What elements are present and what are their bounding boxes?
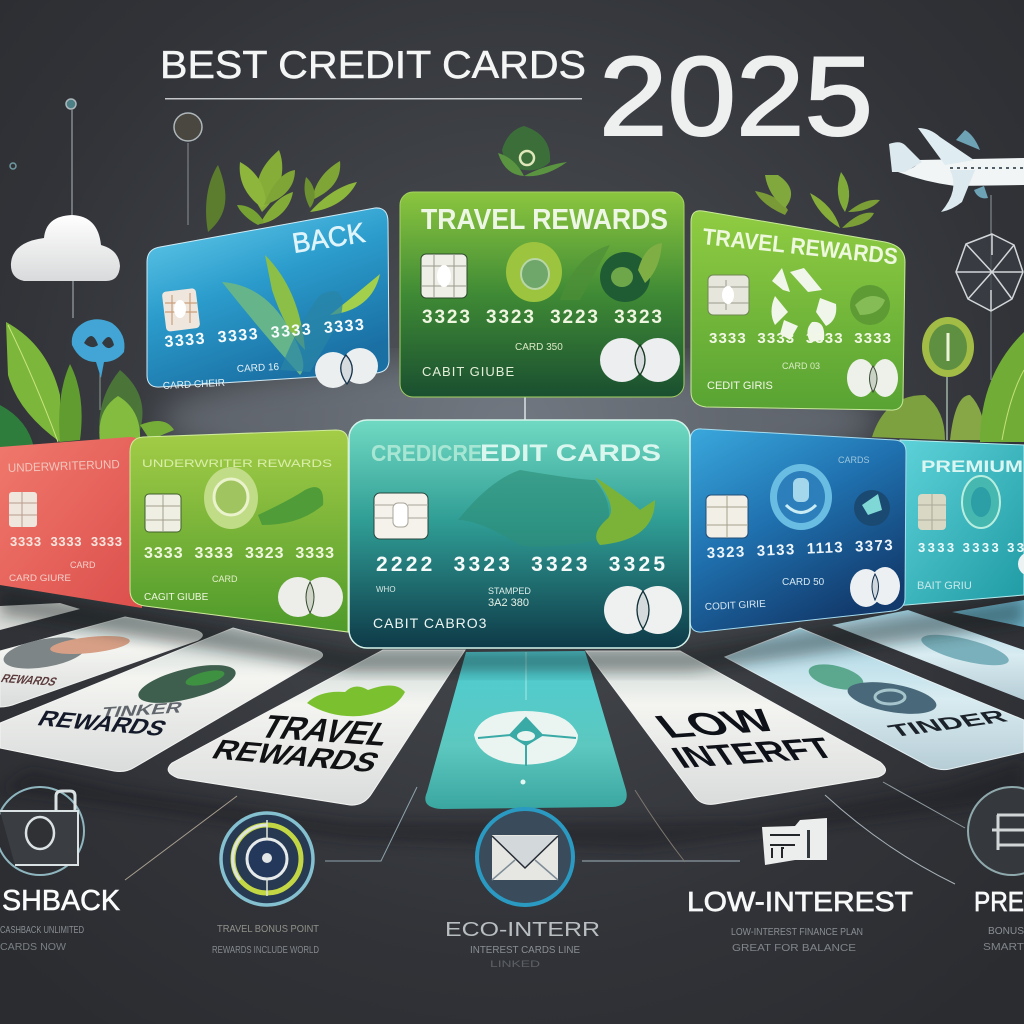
card: teal premium: BAIT GRIU [917,580,972,592]
icon: airplane [889,128,1024,212]
strip: left travel: REWARDS [33,706,172,740]
card: blue mid: 3323 3133 1113 3373 [706,537,893,562]
chip [162,288,200,332]
column: premium [968,787,1024,953]
icon: wire hexagon [956,195,1023,380]
column: premium: BONUS [988,926,1024,937]
card: centre teal credit cards [349,420,690,648]
column: low-interest [687,818,913,954]
card: green mid: CARD [212,574,238,584]
title: best credit cards: BEST CREDIT CARDS [160,44,586,87]
chip [421,254,467,298]
card: blue mid: CARDS [838,455,870,465]
chip [374,493,428,539]
column: cash back: SHBACK [2,885,121,917]
card: teal premium [895,440,1024,606]
card: green travel rewards: CARD 350 [515,342,563,353]
card: red: CARD [70,560,96,570]
icon: blue knot [72,319,124,410]
column: low-interest: GREAT FOR BALANCE [732,943,856,954]
card: centre teal credit cards: CREDICRE [371,440,482,466]
recycle symbol [772,268,836,342]
card: green travel rewards [400,192,684,397]
card: blue cash back: CARD CHEIR [163,378,225,392]
card: centre teal credit cards: STAMPED [488,586,531,596]
card: lime travel rewards: 3333 3333 3333 3333 [709,330,891,347]
card: red: CARD GIURE [9,573,71,583]
strip: travel rewards: TRAVEL [254,710,398,753]
card: green mid [130,430,348,632]
column: eco-interest [445,809,600,969]
icon: document [762,818,827,865]
column: cash back [0,787,121,953]
card: centre teal credit cards: 2222 3323 3323 3325 [376,553,665,576]
column: low-interest: LOW-INTEREST FINANCE PLAN [731,927,863,938]
strip: travel rewards: REWARDS [206,734,385,778]
chip [708,275,749,315]
strip: far right [832,600,1024,700]
column: eco-interest: INTEREST CARDS LINE [470,945,580,956]
card: blue cash back: BACK [290,217,367,259]
column: eco-interest: LINKED [490,959,541,969]
card: lime travel rewards: CARD 03 [782,361,820,371]
card: green travel rewards: CABIT GIUBE [422,364,515,379]
card: blue mid: CODIT GIRIE [705,599,766,613]
icon: leaves right [872,332,1024,442]
chip [145,494,181,532]
icon: leaves top left [206,150,357,232]
card: red: 3333 3333 3333 [10,534,122,549]
card: blue cash back [147,208,389,392]
column: low-interest: LOW-INTEREST [687,886,913,917]
strip: low interest [586,651,886,804]
card: blue mid [690,429,906,632]
strip: travel rewards [168,650,465,805]
strip: low interest: INTERFT [665,731,841,774]
column: cash back: CARDS NOW [0,942,67,953]
card: green travel rewards: 3323 3323 3223 3323 [422,307,662,328]
card: centre teal credit cards: 3A2 380 [488,597,529,609]
title: year: 2025 [599,34,873,159]
icon: leaves top centre [498,126,567,176]
strip: right blue: TINDER [884,707,1012,741]
strip: right blue [725,628,1024,770]
card leaf swirl [458,470,609,547]
icon: flower [474,711,578,765]
card: centre teal credit cards: CABIT CABRO3 [373,615,487,631]
column: cash back: CASHBACK UNLIMITED [0,925,84,936]
card: blue cash back: CARD 16 [237,362,280,375]
strip: low interest: LOW [646,702,785,745]
card: red: UNDERWRITERUND [8,457,120,475]
icon: camera lock [0,787,84,875]
strip: left travel: TINKER [98,700,185,722]
column: rewards target: REWARDS INCLUDE WORLD [212,945,319,956]
strip: centre teal [425,651,627,809]
card: lime travel rewards [691,211,905,410]
card: green travel rewards: TRAVEL REWARDS [421,204,668,236]
chip [706,495,748,538]
strip: far left [0,603,202,707]
icon: cloud [11,215,120,281]
card: green mid: UNDERWRITER REWARDS [142,458,332,470]
leaves on card [222,282,303,375]
decor: left hanging icons [10,99,202,318]
strip: left travel [0,628,323,772]
column: rewards target: TRAVEL BONUS POINT [217,924,319,935]
column: eco-interest: ECO-INTERR [445,919,600,941]
card: teal premium: 3333 3333 33 [918,540,1024,555]
card: green mid: CAGIT GIUBE [144,592,209,603]
icon: leaves top right [755,172,880,228]
connector [524,395,526,422]
icon: green badge [922,317,974,440]
card: centre teal credit cards: EDIT CARDS [480,440,661,467]
card: green mid: 3333 3333 3323 3333 [144,545,334,562]
card: blue mid: CARD 50 [782,577,825,588]
card: lime travel rewards: TRAVEL REWARDS [701,223,899,269]
strip: far left: REWARDS [0,672,59,689]
column: premium: SMART [983,942,1024,953]
column: rewards target [212,813,319,956]
card: lime travel rewards: CEDIT GIRIS [707,380,773,392]
card: centre teal credit cards: WHO [376,585,396,594]
card: blue cash back: 3333 3333 3333 3333 [164,317,365,351]
icon: leaves left [0,322,174,448]
card: red [0,437,142,608]
card: teal premium: PREMIUM [921,457,1023,476]
